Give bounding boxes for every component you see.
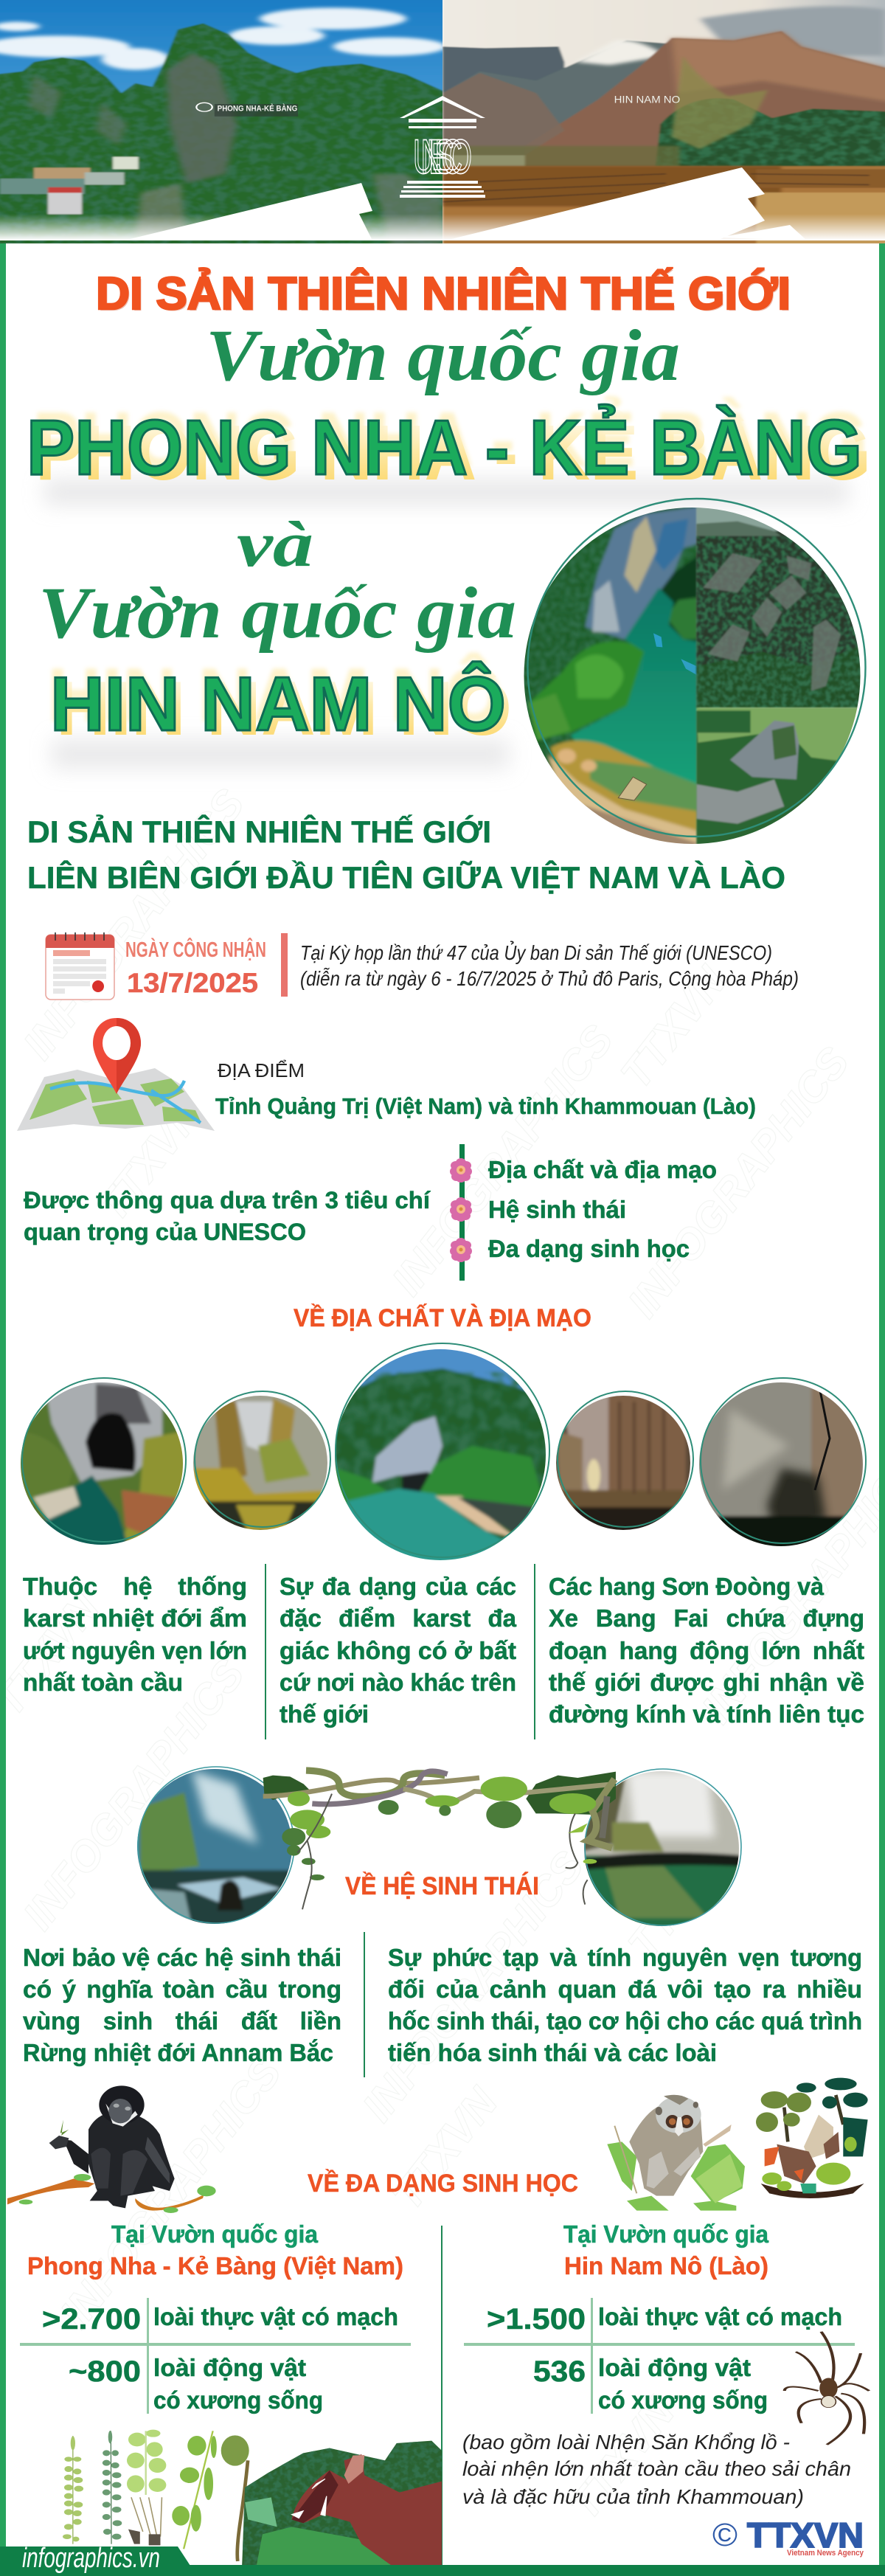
- watermark pattern: TTXVN: [88, 1090, 212, 1230]
- ecosystem text right: Sự phức tạp và tính nguyên vẹn tương: [388, 1944, 862, 1971]
- column divider: [534, 1564, 535, 1739]
- session note: (diễn ra từ ngày 6 - 16/7/2025 ở Thủ đô Paris, Cộng hòa Pháp): [300, 967, 799, 990]
- ecosystem text left: có ý nghĩa toàn cầu trong: [23, 1976, 341, 2003]
- ecosystem text left: vùng sinh thái đất liền: [23, 2007, 341, 2035]
- red divider bar: [281, 933, 288, 997]
- photo caption: Hin Nam No: HIN NAM NO: [614, 94, 680, 105]
- column text: karst system: ướt nguyên vẹn lớn: [23, 1637, 247, 1664]
- criteria intro: [24, 1187, 431, 1245]
- header photo: Phong Nha - Ke Bang: [0, 0, 451, 246]
- photo: stalactites: [193, 1391, 331, 1530]
- panel: Hin Nam No stats: loài thực vật có mạch: [598, 2303, 842, 2330]
- center divider: [441, 2226, 442, 2565]
- illustration: giant huntsman spider: [785, 2332, 870, 2445]
- title: Di san thien nhien the gioi: DI SẢN THIÊN NHIÊN THẾ GIỚI: [97, 270, 792, 321]
- recognition date: [125, 937, 266, 998]
- criteria intro: Được thông qua dựa trên 3 tiêu chí: [24, 1187, 431, 1213]
- recognition date: NGÀY CÔNG NHẬN: [125, 937, 266, 962]
- subtitle: [27, 814, 785, 895]
- watermark pattern: INFOGRAPHICS: [14, 780, 254, 1068]
- photo: Phong Nha cave and river: [335, 1343, 550, 1560]
- icon: map with location pin: [17, 1018, 215, 1131]
- spider note: (bao gồm loài Nhện Săn Khổng lồ -: [462, 2431, 790, 2454]
- panel: Hin Nam No stats: loài động vật: [598, 2354, 751, 2381]
- column text: karst system: [23, 1573, 247, 1696]
- heading: ecosystem: VỀ HỆ SINH THÁI: [345, 1872, 539, 1900]
- header photo: Hin Nam No: [442, 0, 885, 246]
- column divider: [265, 1564, 266, 1739]
- torn paper white shapes: [124, 167, 807, 240]
- recognition date: 13/7/2025: [127, 968, 258, 998]
- hero circular photo: [516, 494, 869, 858]
- header fade: [0, 214, 885, 240]
- infographic canvas: PHONG NHA-KẺ BÀNG: [218, 103, 297, 113]
- watermark pattern: TTXVN: [611, 957, 736, 1098]
- watermark pattern: INFOGRAPHICS: [619, 1038, 858, 1326]
- watermark pattern: [0, 780, 885, 2529]
- title: Di san thien nhien the gioi: DI SẢN THIÊN NHIÊN THẾ GIỚI: [96, 269, 791, 319]
- column text: caves: đoạn hang động lớn nhất: [549, 1637, 864, 1664]
- panel: Phong Nha stats: Phong Nha - Kẻ Bàng (Việt Nam): [27, 2252, 403, 2279]
- watermark pattern: INFOGRAPHICS: [353, 1842, 593, 2130]
- ecosystem text right: hốc sinh thái, tạo cơ hội cho các quá trình: [388, 2007, 862, 2035]
- park name: Hin Nam No: HIN NAM NÔ: [56, 665, 512, 752]
- panel: Phong Nha stats: loài động vật: [153, 2354, 306, 2381]
- panel: Hin Nam No stats: Tại Vườn quốc gia: [563, 2220, 769, 2248]
- panel: Hin Nam No stats: >1.500: [487, 2303, 586, 2336]
- criteria list: [450, 1144, 717, 1281]
- illustration: ferns: [63, 2430, 249, 2561]
- spider note: loài nhện lớn nhất toàn cầu theo sải chân: [462, 2457, 851, 2480]
- ecosystem text right: đối của cảnh quan đá vôi tạo ra nhiều: [388, 1976, 862, 2003]
- photo: cave with sinkhole: [133, 1763, 295, 1929]
- column text: karst system: karst nhiệt đới ẩm: [23, 1604, 247, 1632]
- panel: Hin Nam No stats: 536: [533, 2355, 586, 2388]
- column text: caves: đường kính và tính liên tục: [549, 1700, 864, 1728]
- photo: cave mouth: [15, 1378, 192, 1549]
- panel: Hin Nam No stats: có xương sống: [598, 2386, 768, 2414]
- photo: Son Doong columns: [556, 1391, 694, 1530]
- heading: biodiversity: VỀ ĐA DẠNG SINH HỌC: [308, 2170, 578, 2198]
- criteria list: Đa dạng sinh học: [488, 1235, 690, 1262]
- conjunction: va: và: [237, 509, 313, 581]
- column text: karst system: Thuộc hệ thống: [23, 1573, 247, 1600]
- ecosystem text left: Rừng nhiệt đới Annam Bắc: [23, 2039, 333, 2066]
- panel: Phong Nha stats: >2.700: [42, 2303, 141, 2336]
- watermark pattern: INFOGRAPHICS: [14, 1650, 254, 1939]
- UNESCO emblem: [400, 96, 485, 198]
- heading: geology: VỀ ĐỊA CHẤT VÀ ĐỊA MẠO: [294, 1304, 591, 1332]
- column text: karst system: nhất toàn cầu: [23, 1669, 183, 1696]
- ecosystem text left: Nơi bảo vệ các hệ sinh thái: [23, 1944, 341, 1971]
- column text: caves: [549, 1573, 864, 1728]
- column text: karst diversity: [280, 1573, 517, 1728]
- panel: Phong Nha stats: ~800: [69, 2355, 141, 2388]
- illustration: jungle island: [756, 2078, 868, 2198]
- location text: [215, 1059, 756, 1119]
- panel: Phong Nha stats: loài thực vật có mạch: [153, 2303, 398, 2330]
- icon: calendar: [46, 932, 114, 1000]
- sign on cliff: [196, 103, 298, 117]
- spider note: [462, 2431, 851, 2508]
- UNESCO emblem: UNESCO: [413, 130, 472, 184]
- ecosystem text left: [23, 1944, 341, 2066]
- criteria intro: quan trọng của UNESCO: [24, 1219, 306, 1245]
- watermark pattern: INFOGRAPHICS: [51, 2049, 291, 2337]
- column text: karst diversity: Sự đa dạng của các: [280, 1573, 516, 1600]
- column text: caves: thế giới được ghi nhận về: [549, 1669, 864, 1696]
- park name: Hin Nam No: HIN NAM NÔ: [50, 661, 506, 747]
- panel: Phong Nha stats: có xương sống: [153, 2386, 323, 2414]
- column text: caves: Xe Bang Fai chứa đựng: [549, 1604, 864, 1632]
- watermark pattern: TTXVN: [619, 1827, 743, 1968]
- illustration: slow loris: [607, 2095, 745, 2211]
- illustration: gibbon on branch: [7, 2085, 216, 2213]
- column text: karst diversity: đặc điểm karst đa: [280, 1604, 517, 1632]
- illustration: saola in foliage: [242, 2441, 442, 2565]
- panel: Phong Nha stats: Tại Vườn quốc gia: [111, 2220, 319, 2248]
- criteria list: Địa chất và địa mạo: [488, 1156, 717, 1183]
- bottom band: [0, 2565, 885, 2576]
- logo: TTXVN: Vietnam News Agency: [787, 2549, 864, 2558]
- subtitle: LIÊN BIÊN GIỚI ĐẦU TIÊN GIỮA VIỆT NAM VÀ LÀO: [27, 859, 785, 895]
- column text: caves: Các hang Sơn Đoòng và: [549, 1573, 825, 1600]
- column text: karst diversity: cứ nơi nào khác trên: [280, 1669, 516, 1696]
- column text: karst diversity: giác không có ở bất: [280, 1637, 516, 1664]
- photo: Xe Bang Fai cave: [697, 1378, 867, 1553]
- watermark pattern: TTXVN: [560, 2388, 684, 2529]
- logo: TTXVN: [712, 2516, 864, 2558]
- logo: TTXVN: ©: [712, 2517, 738, 2553]
- panel: Hin Nam No stats: [464, 2220, 855, 2414]
- photo: cave with reflection: [583, 1767, 741, 1929]
- panel: Phong Nha stats: [20, 2220, 411, 2414]
- ecosystem text right: tiến hóa sinh thái và các loài: [388, 2039, 717, 2066]
- session note: [300, 940, 799, 990]
- session note: Tại Kỳ họp lần thứ 47 của Ủy ban Di sản Thế giới (UNESCO): [300, 940, 772, 964]
- panel: Hin Nam No stats: Hin Nam Nô (Lào): [564, 2252, 768, 2279]
- footer tab: infographics.vn: infographics.vn: [22, 2543, 160, 2574]
- column text: karst diversity: thế giới: [280, 1700, 369, 1728]
- ecosystem text right: [388, 1944, 862, 2066]
- subtitle: DI SẢN THIÊN NHIÊN THẾ GIỚI: [27, 814, 491, 849]
- location text: ĐỊA ĐIỂM: [218, 1059, 305, 1081]
- park name: Hin Nam No: HIN NAM NÔ: [47, 652, 503, 738]
- watermark pattern: TTXVN: [383, 2078, 507, 2219]
- location text: Tỉnh Quảng Trị (Việt Nam) và tỉnh Khammouan (Lào): [215, 1093, 756, 1119]
- spider note: và là đặc hữu của tỉnh Khammouan): [462, 2485, 804, 2508]
- ecosystem divider: [364, 1932, 365, 2077]
- watermark pattern: INFOGRAPHICS: [383, 1016, 622, 1304]
- script heading 1: Vườn quốc gia: [206, 314, 680, 396]
- vine illustration: [263, 1770, 616, 1909]
- script heading 2: Vườn quốc gia: [38, 572, 516, 654]
- criteria list: Hệ sinh thái: [488, 1196, 626, 1223]
- logo: TTXVN: TTXVN: [747, 2516, 864, 2555]
